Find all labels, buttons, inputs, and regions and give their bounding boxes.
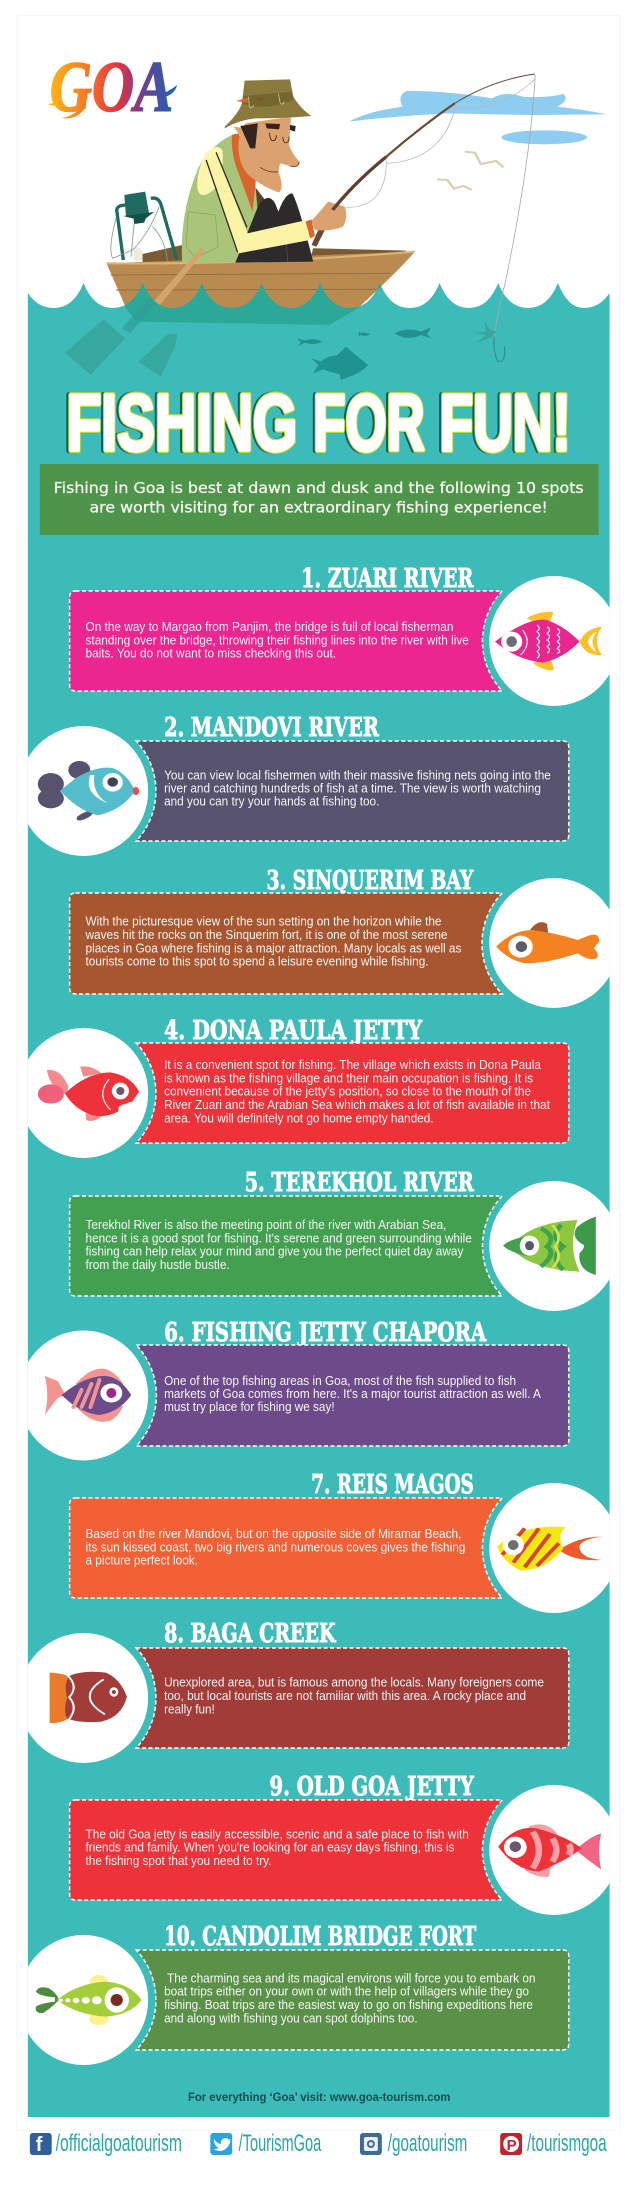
oar above water [144, 248, 205, 318]
heading: 2. MANDOVI RIVER [164, 713, 379, 743]
heading: 6. FISHING JETTY CHAPORA [164, 1318, 487, 1348]
section 7: Reis Magos [70, 1470, 619, 1613]
card [70, 1498, 502, 1598]
intro banner [40, 464, 599, 535]
title: Fishing for Fun!: FUN! [438, 378, 569, 467]
card: river and catching hundreds of fish at a time. The view is worth watching [164, 781, 541, 796]
card: River Zuari and the Arabian Sea which makes a lot of fish available in that [164, 1098, 550, 1112]
card: baits. You do not want to miss checking this out. [86, 646, 336, 661]
fish badge [19, 1935, 148, 2065]
boat hull above water [107, 248, 415, 308]
section 3: Sinquerim Bay [70, 866, 619, 1008]
title: Fishing for Fun!: FOR [313, 378, 425, 467]
fish badge [19, 1028, 148, 1158]
card [136, 1950, 569, 2050]
card: and along with fishing you can spot dolphins too. [164, 2011, 418, 2026]
card: area. You will definitely not go home empty handed. [164, 1111, 434, 1126]
card: really fun! [164, 1702, 215, 1717]
card: its sun kissed coast, two big rivers and numerous coves gives the fishing [86, 1540, 465, 1555]
title: Fishing for Fun!: FISHING [65, 378, 295, 467]
intro banner: are worth visiting for an extraordinary fishing experience! [89, 498, 548, 517]
card [70, 893, 502, 994]
section 9: Old Goa Jetty [70, 1772, 619, 1915]
card: standing over the bridge, throwing their fishing lines into the river with live [86, 633, 469, 648]
underwater shadows: boat, oars, fish, hook [65, 283, 506, 380]
heading: 9. OLD GOA JETTY [269, 1772, 474, 1802]
fish badge [489, 1785, 619, 1915]
pinterest: P [507, 2137, 517, 2154]
card: On the way to Margao from Panjim, the bridge is full of local fisherman [86, 620, 454, 634]
section 2: Mandovi River [19, 713, 569, 856]
card: It is a convenient spot for fishing. The village which exists in Dona Paula [164, 1058, 541, 1072]
card [136, 1648, 569, 1748]
card: hence it is a good spot for fishing. It's serene and green surrounding while [86, 1231, 472, 1246]
fish badge [489, 1483, 619, 1613]
facebook: /officialgoatourism [56, 2130, 182, 2157]
card: is known as the fishing village and their main occupation is fishing. It is [164, 1071, 533, 1086]
social row [30, 2130, 607, 2157]
section 4: Dona Paula Jetty [19, 1016, 569, 1158]
heading: 8. BAGA CREEK [164, 1619, 337, 1649]
card: must try place for fishing we say! [164, 1400, 335, 1414]
twitter: /TourismGoa [239, 2130, 322, 2157]
card: tourists come to this spot to spend a leisure evening while fishing. [86, 954, 429, 969]
card [136, 741, 569, 841]
title: Fishing for Fun!: FOR [311, 378, 423, 467]
card: Terekhol River is also the meeting point of the river with Arabian Sea, [86, 1218, 446, 1232]
fish badge [19, 726, 148, 856]
card: With the picturesque view of the sun setting on the horizon while the [86, 914, 442, 929]
card: Based on the river Mandovi, but on the opposite side of Miramar Beach, [86, 1527, 461, 1541]
intro banner: Fishing in Goa is best at dawn and dusk and the following 10 spots [54, 479, 584, 497]
section 10: Candolim Bridge Fort [19, 1922, 569, 2065]
figure: fisherman [182, 79, 346, 263]
title: Fishing for Fun!: FUN! [440, 378, 571, 467]
title: Fishing for Fun! [65, 378, 571, 467]
card: from the daily hustle bustle. [86, 1258, 230, 1272]
card: a picture perfect look. [86, 1553, 198, 1568]
card: waves hit the rocks on the Sinquerim fort, it is one of the most serene [85, 928, 448, 942]
heading: 1. ZUARI RIVER [301, 564, 474, 594]
heading: 4. DONA PAULA JETTY [164, 1016, 423, 1046]
card [136, 1345, 569, 1446]
facebook [30, 2130, 182, 2157]
card: places in Goa where fishing is a major attraction. Many locals as well as [86, 941, 461, 956]
card: You can view local fishermen with their massive fishing nets going into the [164, 768, 551, 783]
card [70, 591, 502, 691]
section 1: Zuari River [70, 564, 619, 706]
title: Fishing for Fun!: FISHING [67, 378, 297, 467]
card [136, 1043, 569, 1143]
heading: 3. SINQUERIM BAY [266, 866, 474, 896]
instagram: /goatourism [388, 2130, 467, 2157]
fisherman in boat illustration [107, 74, 535, 353]
card: The charming sea and its magical environs will force you to embark on [167, 1971, 536, 1986]
card: fishing can help relax your mind and give you the perfect quiet day away [86, 1244, 464, 1259]
fish badge [489, 878, 619, 1008]
card [70, 1800, 502, 1900]
card [70, 1196, 502, 1296]
title: Fishing for Fun!: FOR [313, 378, 425, 467]
logo: GOA: GOA [50, 47, 173, 127]
heading: 10. CANDOLIM BRIDGE FORT [164, 1922, 477, 1952]
card: convenient because of the jetty's position, so close to the mouth of the [164, 1084, 531, 1099]
fish badge [489, 576, 619, 706]
title: Fishing for Fun!: FUN! [440, 378, 571, 467]
card: The old Goa jetty is easily accessible, scenic and a safe place to fish with [86, 1827, 469, 1842]
facebook: f [36, 2134, 43, 2156]
card: boat trips either on your own or with the help of villagers while they go [164, 1984, 529, 1999]
card: fishing. Boat trips are the easiest way to go on fishing expeditions here [164, 1998, 533, 2012]
card: Unexplored area, but is famous among the locals. Many foreigners come [164, 1675, 544, 1690]
card: One of the top fishing areas in Goa, most of the fish supplied to fish [164, 1374, 516, 1388]
card: the fishing spot that you need to try. [86, 1854, 271, 1868]
icon: lantern [111, 192, 182, 263]
teal sea panel with wave top [28, 283, 610, 2117]
title: Fishing for Fun!: FISHING [67, 378, 297, 467]
fish badge [19, 1330, 148, 1460]
pinterest [500, 2130, 607, 2157]
fishing rod and line [333, 74, 535, 353]
card: markets of Goa comes from here. It's a major tourist attraction as well. A [164, 1387, 542, 1401]
section 6: Fishing Jetty Chapora [19, 1318, 569, 1460]
twitter [210, 2130, 322, 2157]
fish badge [489, 1181, 619, 1311]
footer website line: For everything ‘Goa’ visit: www.goa-tourism.com [188, 2090, 450, 2104]
card: friends and family. When you're looking for an easy days fishing, this is [86, 1840, 454, 1855]
fish badge [19, 1633, 148, 1763]
scenery: clouds, birds [349, 91, 607, 190]
section 5: Terekhol River [70, 1168, 619, 1311]
card: and you can try your hands at fishing too. [164, 794, 379, 809]
section 8: Baga Creek [19, 1619, 569, 1763]
heading: 7. REIS MAGOS [311, 1470, 474, 1500]
instagram [360, 2130, 467, 2157]
heading: 5. TEREKHOL RIVER [245, 1168, 474, 1198]
card: too, but local tourists are not familiar with this area. A rocky place and [164, 1689, 526, 1703]
